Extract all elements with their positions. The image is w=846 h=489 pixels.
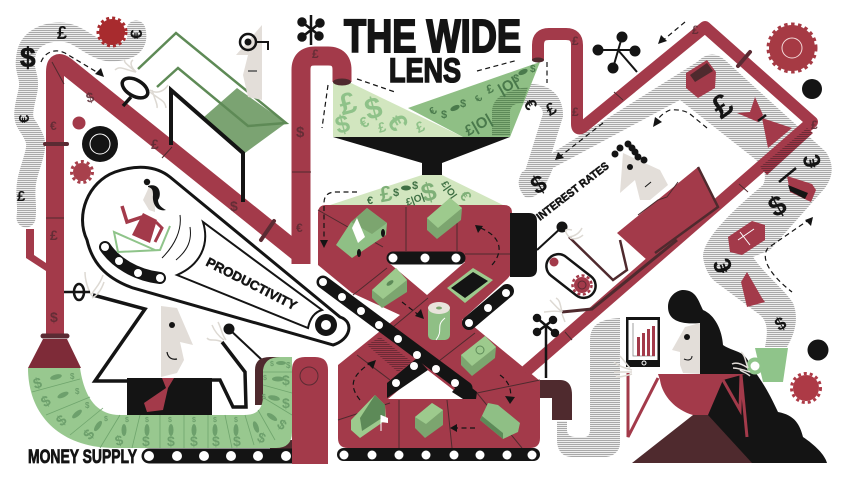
capsule end roller (315, 314, 337, 336)
money band: dollar notes: $ (167, 433, 175, 449)
money band: dollar notes: $ (145, 417, 149, 424)
currency on smoke: right (520, 86, 827, 335)
weathervane: top (298, 15, 324, 45)
money glyphs in left beam (332, 86, 428, 140)
money band: dollar notes: $ (75, 387, 80, 396)
capsule belt (101, 243, 164, 282)
money band: dollar notes: $ (286, 361, 291, 370)
man: body and arms (93, 295, 246, 415)
asterisk linkage (594, 32, 640, 72)
arm to long pipe (562, 240, 677, 312)
item: box (415, 403, 443, 438)
hand at arm (544, 298, 565, 322)
steering wheel (119, 74, 151, 106)
money glyphs in left beam: $ (361, 91, 386, 127)
smoke stream: top left (24, 30, 137, 218)
lens: darker green right beam (408, 62, 540, 137)
top-left structure: green fill (204, 88, 286, 153)
smoke stream: lower right (557, 318, 620, 457)
machine: seam lines (318, 207, 540, 448)
gear: lower right (792, 374, 820, 402)
figure: top face (236, 25, 262, 100)
money glyphs in left beam: £ (413, 118, 428, 137)
belt: money supply (144, 451, 292, 461)
roller: red front (292, 440, 328, 464)
machine: hatched shadow (367, 337, 412, 372)
money glyphs above machine: £|O| (439, 179, 459, 201)
arrowheads (95, 35, 813, 432)
currency on pipes: € (296, 221, 303, 235)
interest person: face (620, 153, 668, 200)
money band: dollar notes: $ (282, 395, 290, 411)
money glyphs in right beam: $ (441, 109, 447, 121)
currency on pipes: £ (151, 136, 159, 152)
woman: red arms (628, 373, 747, 437)
currency on smoke: right: € (520, 96, 541, 114)
money glyphs in left beam: £ (376, 118, 388, 136)
machine: upper notch (388, 262, 465, 295)
weathervane: lower right (534, 315, 558, 378)
interest person: coat edges (638, 167, 718, 253)
top-left structure: green outlines (138, 33, 286, 126)
money band: dollar notes: $ (190, 433, 198, 449)
money glyphs in right beam (427, 64, 536, 140)
money band: dollar notes: $ (213, 417, 217, 424)
interest person: eye, mouth (627, 164, 651, 187)
light green projection above machine (330, 175, 503, 205)
smoke stream: arch beside funnel (501, 94, 553, 176)
money band: dollar notes: $ (282, 372, 290, 388)
gear: top right (768, 24, 816, 72)
tap: maroon (540, 380, 572, 420)
icon: parcel (686, 60, 716, 98)
circles and gear upper-left (72, 116, 118, 182)
money band: dollar notes: $ (104, 416, 108, 423)
item: smartphone (447, 268, 493, 303)
currency on pipes: $ (84, 88, 96, 106)
label: interest rates: INTEREST RATES (535, 160, 612, 223)
money glyphs above machine: £ (378, 180, 395, 207)
money band: dollar notes: $ (31, 374, 44, 393)
currency on smoke: right: € (708, 255, 739, 277)
icon: dress (737, 97, 792, 148)
currency on smoke: right: $ (763, 189, 792, 223)
pipe end: dark opening (333, 78, 351, 86)
money glyphs in left beam: € (357, 113, 373, 132)
currency on smoke: left (16, 23, 146, 205)
man: tie (144, 378, 174, 412)
currency on pipes: £ (572, 105, 579, 119)
lever: right machine (537, 222, 568, 250)
item: shirt (480, 403, 520, 439)
smoke stream: upper right loop and tail (519, 54, 832, 347)
money glyphs in right beam: $ (530, 64, 536, 75)
money band: dollar notes: $ (168, 417, 172, 424)
money glyphs in right beam: € (473, 93, 486, 104)
roller: red (292, 357, 328, 464)
woman: eye and smile (684, 334, 692, 360)
currency on pipes: £ (811, 118, 818, 132)
money glyphs above machine: € (367, 195, 373, 207)
woman: face (672, 323, 700, 374)
pipe: hatched overlap on smoke (760, 128, 813, 175)
man: hands (85, 272, 226, 342)
money glyphs in right beam: £ (484, 81, 496, 97)
money band: dollar notes: $ (192, 417, 196, 424)
left side stub (26, 229, 46, 271)
item: banknote stack right (461, 336, 496, 376)
interest person: hand (566, 228, 583, 239)
money band: dollar notes: $ (255, 429, 268, 446)
pipe collars (45, 52, 750, 240)
interest person: arm (569, 237, 627, 280)
interest person: body (617, 167, 718, 260)
money glyphs above machine: € (456, 188, 475, 205)
money glyphs above machine: $ (393, 187, 399, 199)
belt: bottom of machine (337, 448, 540, 461)
currency on pipes: $ (230, 198, 238, 214)
currency on pipes: $ (296, 124, 305, 141)
pipe: left and long diagonal (55, 63, 301, 335)
belt: diagonal lower left (387, 358, 428, 398)
machine: lower notch (388, 368, 465, 399)
currency on smoke: left: £ (57, 23, 67, 43)
woman: hair (668, 290, 827, 463)
money glyphs in left beam: € (381, 109, 414, 136)
currency on pipes: $ (50, 309, 58, 325)
interest person: curly hair (612, 140, 648, 164)
runner on sled (114, 179, 190, 260)
money band: dollar notes: $ (85, 401, 90, 410)
label: productivity: PRODUCTIVITY (204, 254, 300, 313)
machine: black side block (510, 213, 537, 277)
hands at steering wheel (115, 60, 168, 108)
label: money supply: MONEY SUPPLY (28, 447, 137, 468)
woman: skirt (632, 415, 752, 463)
money glyphs above machine: $ (418, 175, 440, 208)
money glyphs above machine: $ (412, 180, 418, 192)
currency on smoke: left: £ (17, 188, 26, 205)
money band (28, 357, 292, 448)
funnel (333, 137, 510, 175)
machine: X-shaped red body (318, 205, 540, 448)
hand at tablet (614, 356, 632, 377)
item: car (336, 208, 387, 258)
money band: dollar notes: $ (113, 431, 125, 449)
currency on smoke: left: € (127, 29, 146, 39)
lens: hatch overlap (492, 87, 528, 136)
figure: mouth (248, 70, 257, 72)
currency on smoke: left: $ (20, 42, 36, 73)
title (344, 10, 521, 90)
currency on smoke: left: € (16, 114, 33, 123)
icon: coffee cup (779, 168, 816, 202)
money glyphs in left beam: £ (336, 86, 361, 122)
money glyphs above machine: £|O| (405, 192, 426, 209)
belt loop with gear (542, 249, 600, 303)
money glyphs in left beam: $ (332, 109, 353, 140)
item: banknote stack top (427, 198, 462, 239)
currency on pipes (50, 23, 818, 325)
money glyphs in right beam: $ (460, 98, 466, 110)
man: lever (224, 324, 262, 360)
title: THE WIDE (344, 10, 521, 62)
title: LENS (389, 52, 461, 90)
money band: dollar notes: $ (70, 372, 75, 381)
money glyphs in right beam: $ (513, 73, 519, 85)
woman: red top (658, 374, 745, 415)
money band: dollar notes: $ (262, 394, 266, 401)
icon: price tag (741, 272, 765, 307)
belt: top of machine (388, 254, 460, 262)
money band: dollar notes: $ (263, 375, 267, 382)
money band: dollar notes: $ (80, 426, 99, 443)
money band: dollar notes: $ (234, 417, 238, 424)
money band: dollar notes: $ (142, 433, 150, 449)
currency on smoke: right: £ (704, 86, 740, 125)
currency on pipes: € (50, 119, 57, 133)
money band: dollar notes: $ (212, 433, 220, 449)
black dot: lower right (808, 340, 828, 360)
item: banknote stack left (372, 268, 407, 308)
item: house (351, 395, 388, 438)
money glyphs in right beam: € (427, 105, 440, 118)
icon: luggage tag with plane (728, 221, 765, 255)
pipe: centre vertical arch (301, 56, 342, 264)
currency on smoke: right: £ (542, 98, 560, 120)
currency on pipes: £ (50, 227, 58, 243)
coffee cup: green (748, 348, 788, 382)
money band: divisions (32, 372, 292, 448)
money band: dollar notes: $ (233, 433, 241, 449)
money band: dollar notes: $ (270, 361, 274, 368)
currency on smoke: right: € (798, 152, 827, 170)
pipe foot funnel (28, 336, 81, 368)
money glyphs above machine (367, 175, 475, 209)
tablet (626, 317, 660, 367)
belt: main diagonal (319, 278, 477, 399)
money glyphs in right beam: £|O| (462, 111, 495, 140)
currency on pipes: £ (692, 23, 699, 37)
productivity capsule outline (83, 167, 349, 345)
figure: eye and key (240, 34, 268, 50)
belt: diagonal upper right (465, 289, 510, 327)
wheel: left (64, 284, 90, 300)
money band: maroon backing (255, 357, 292, 450)
money band: dollar notes: $ (38, 392, 54, 411)
currency on smoke: right: $ (526, 169, 552, 200)
gear: top red (98, 18, 126, 46)
item: can (428, 302, 450, 340)
man: face (161, 306, 193, 377)
pipe end: dark opening right (532, 58, 544, 62)
money band: dollar notes: $ (53, 411, 71, 430)
man: eye and smile (167, 322, 177, 359)
currency on smoke: right: $ (771, 313, 790, 335)
lens: pale green left beam (333, 83, 463, 137)
currency on pipes: £ (312, 47, 319, 61)
top-left structure: black outline (171, 90, 243, 202)
pipe: thin seams (46, 62, 748, 340)
money band: dollar notes: $ (274, 416, 290, 433)
money band: dollar notes: $ (125, 417, 129, 424)
productivity inner panel (177, 222, 322, 328)
currency on pipes: £ (572, 34, 579, 48)
hand at cup (732, 352, 750, 376)
black dot: top right (802, 79, 822, 99)
dashed arrow paths (41, 22, 810, 428)
pipe: right zig-zag (525, 27, 812, 372)
money glyphs in right beam: |O| (495, 74, 521, 99)
money band: dollar notes (31, 361, 291, 449)
